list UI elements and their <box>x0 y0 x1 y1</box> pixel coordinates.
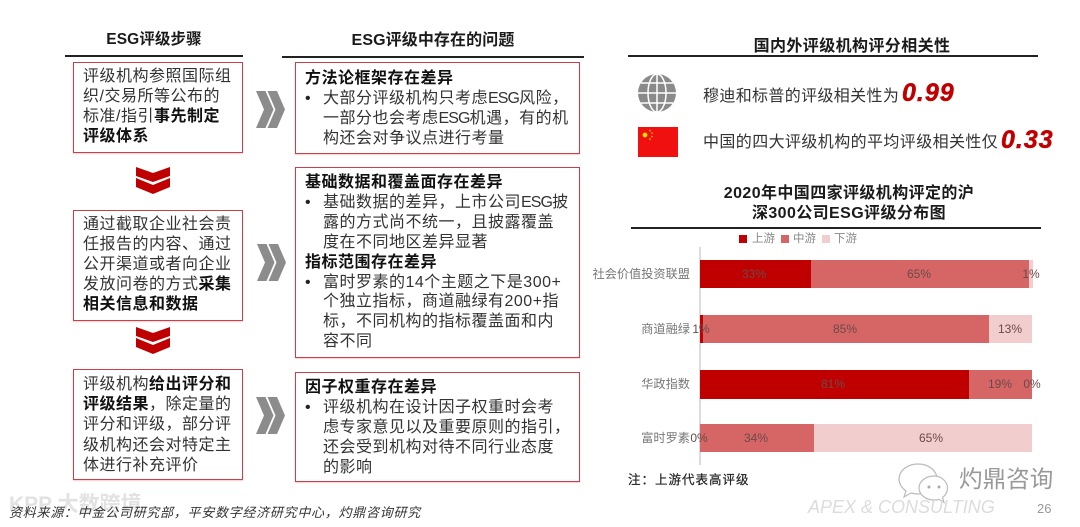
page number: 26 <box>1037 501 1051 516</box>
row: 华政指数: 华政指数 <box>641 377 690 391</box>
text: Moody's and S&P correlation: 穆迪和标普的评级相关性为 <box>703 88 899 105</box>
icon: grey right chevrons 1 <box>256 91 285 128</box>
row: 富时罗素: 富时罗素 <box>641 431 690 445</box>
panel: factor weight differences: 的影响 <box>323 459 373 476</box>
panel: step 1: 标准/指引事先制定 <box>83 108 220 125</box>
panel: step 2: 任报告的内容、通过 <box>83 236 232 253</box>
icon: grey right chevrons 2 <box>257 244 286 281</box>
panel: data and coverage differences: 基础数据和覆盖面存在差异 <box>305 174 503 191</box>
panel: step 3: 评级结果，除定量的 <box>83 396 232 413</box>
panel: step 3: 体进行补充评价 <box>83 457 199 474</box>
panel: step 3 <box>73 369 243 480</box>
panel: step 1: 评级体系 <box>83 128 149 145</box>
chart legend: 中游 <box>793 233 816 245</box>
bar chart: rating distribution <box>592 247 1041 465</box>
panel: step 1: 织/交易所等公布的 <box>83 88 220 105</box>
text: China four agencies correlation: 中国的四大评级机构的平均评级相关性仅 <box>703 134 998 151</box>
chart legend <box>739 232 857 245</box>
row: 社会价值投资联盟: 1% <box>1022 267 1040 281</box>
icon: WeChat watermark <box>898 463 948 504</box>
watermark: APEX & CONSULTING: APEX & CONSULTING <box>808 497 995 517</box>
row: 商道融绿: 1% <box>692 322 710 336</box>
panel: methodology differences: 方法论框架存在差异 <box>305 70 454 87</box>
panel: step 2: 公开渠道或者向企业 <box>83 256 232 273</box>
heading: chart title <box>724 184 974 222</box>
panel: data and coverage differences: 指标范围存在差异 <box>305 254 437 271</box>
row: 华政指数 <box>641 370 1041 399</box>
row: 富时罗素: 65% <box>919 431 943 445</box>
row: 富时罗素: 34% <box>744 431 768 445</box>
note: 注：上游代表高评级 <box>628 473 750 487</box>
row: 富时罗素: 0% <box>690 431 708 445</box>
panel: step 3: 级机构还会对特定主 <box>83 437 232 454</box>
row: 社会价值投资联盟 <box>592 260 1040 288</box>
row: 社会价值投资联盟: 33% <box>742 267 766 281</box>
row: 华政指数: 0% <box>1023 377 1041 391</box>
icon: red down chevrons 2 <box>136 327 170 354</box>
watermark: KPP: KPP 大数跨境 <box>9 493 142 516</box>
number: 0.99: 0.99 <box>902 79 955 107</box>
panel: factor weight differences: 还会受到机构对待不同行业态度 <box>323 439 554 456</box>
number: 0.33: 0.33 <box>1001 126 1054 154</box>
panel: data and coverage differences: 容不同 <box>323 333 373 350</box>
row: 商道融绿: 85% <box>833 322 857 336</box>
watermark: brand name: 灼鼎咨询 <box>959 466 1053 492</box>
panel: data and coverage differences: 富时罗素的14个主题之下是300+ <box>323 274 561 291</box>
heading: rating correlation: 国内外评级机构评分相关性 <box>754 38 950 55</box>
panel: step 2: 通过截取企业社会责 <box>83 216 232 233</box>
source line: 资料来源：中金公司研究部，平安数字经济研究中心，灼鼎咨询研究 <box>9 505 421 520</box>
panel: methodology differences <box>295 62 580 154</box>
icon: red down chevrons 1 <box>136 167 170 194</box>
panel: factor weight differences <box>295 372 580 482</box>
panel: step 2: 发放问卷的方式采集 <box>83 276 232 293</box>
panel: step 2 <box>73 210 243 321</box>
chart legend: 下游 <box>834 233 857 245</box>
panel: step 3: 评分和评级，部分评 <box>83 416 232 433</box>
panel: methodology differences: 大部分评级机构只考虑ESG风险， <box>323 90 569 107</box>
panel: methodology differences: 构还会对争议点进行考量 <box>323 130 505 147</box>
panel: data and coverage differences: 度在不同地区差异显著 <box>323 234 488 251</box>
chart legend: 上游 <box>752 233 775 245</box>
panel: step 3: 评级机构给出评分和 <box>83 376 232 393</box>
panel: factor weight differences: 评级机构在设计因子权重时会考 <box>323 399 554 416</box>
heading: chart title: 深300公司ESG评级分布图 <box>752 204 946 222</box>
panel: step 2: 相关信息和数据 <box>83 296 199 313</box>
panel: data and coverage differences: 露的方式尚不统一，且披露覆盖 <box>323 214 554 231</box>
row: 华政指数: 19% <box>988 377 1012 391</box>
panel: factor weight differences: 因子权重存在差异 <box>305 379 437 396</box>
row: 商道融绿 <box>641 315 1032 343</box>
heading: problems in ESG rating: ESG评级中存在的问题 <box>352 32 514 49</box>
heading: chart title: 2020年中国四家评级机构评定的沪 <box>724 185 974 202</box>
icon: globe <box>638 74 676 112</box>
row: 富时罗素 <box>641 424 1032 452</box>
row: 华政指数: 81% <box>821 377 845 391</box>
row: 商道融绿: 13% <box>998 322 1022 336</box>
panel: step 1 <box>73 62 243 153</box>
icon: China flag <box>638 127 678 157</box>
panel: methodology differences: 一部分也会考虑ESG机遇，有的机 <box>323 110 569 127</box>
panel: data and coverage differences <box>295 167 580 358</box>
panel: data and coverage differences: 基础数据的差异，上市公司ESG披 <box>323 194 569 211</box>
row: 社会价值投资联盟: 社会价值投资联盟 <box>592 267 690 281</box>
row: 社会价值投资联盟: 65% <box>907 267 931 281</box>
panel: step 1: 评级机构参照国际组 <box>83 68 232 85</box>
icon: grey right chevrons 3 <box>256 397 285 434</box>
panel: factor weight differences: 虑专家意见以及重要原则的指引， <box>323 419 571 436</box>
panel: data and coverage differences: 标，不同机构的指标覆盖面和内 <box>323 313 554 330</box>
heading: ESG rating steps: ESG评级步骤 <box>106 31 202 48</box>
row: 商道融绿: 商道融绿 <box>641 322 690 336</box>
panel: data and coverage differences: 个独立指标，商道融绿有200+指 <box>323 293 559 310</box>
